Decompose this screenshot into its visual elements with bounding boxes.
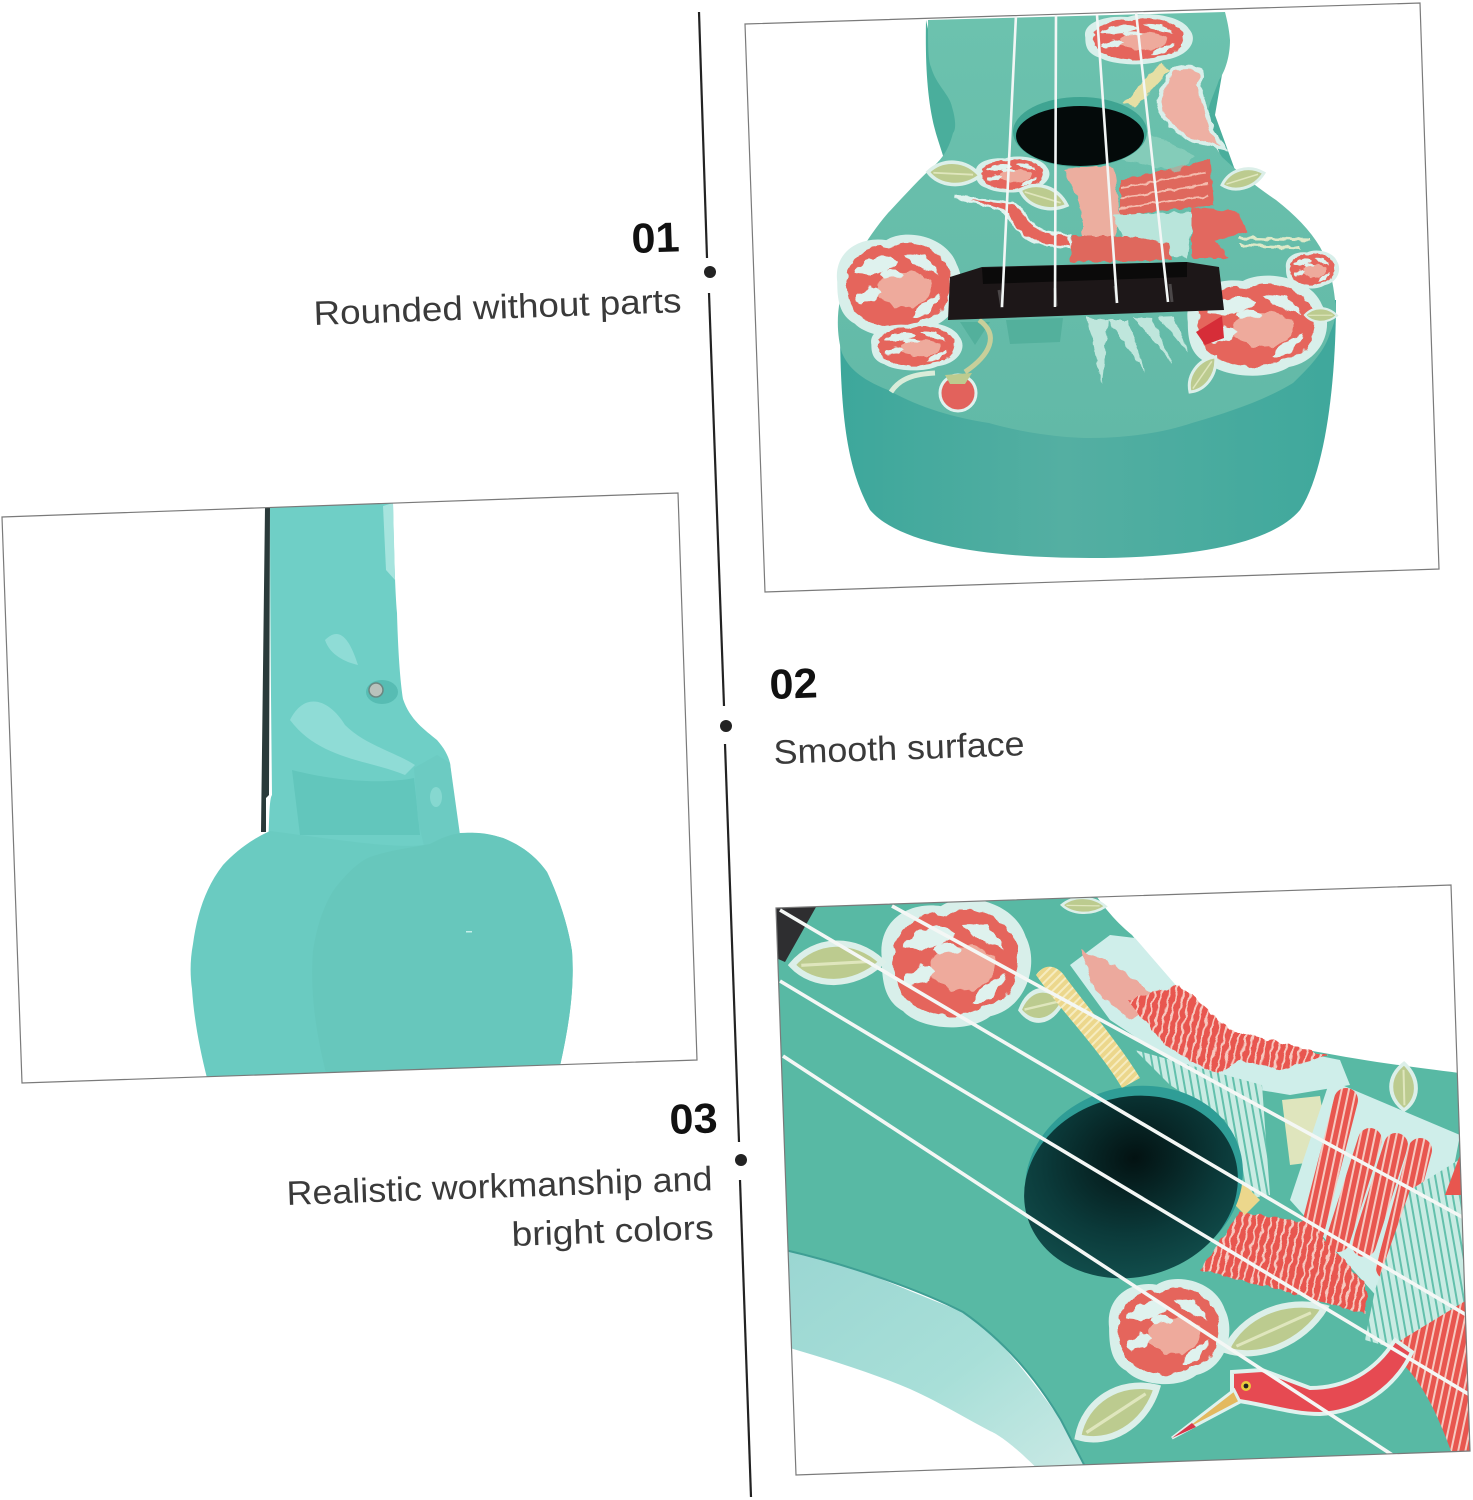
- neck block: [776, 907, 816, 962]
- body side: [191, 831, 573, 1078]
- tail red: [1070, 236, 1172, 262]
- fretboard edge: [261, 507, 270, 832]
- crane neck: [1232, 1340, 1412, 1414]
- number 01: 01: [631, 213, 680, 262]
- small mark: [466, 931, 472, 932]
- top flower: [881, 899, 1031, 1027]
- pale yellow feather: [1282, 1096, 1330, 1165]
- stems: [965, 320, 990, 372]
- tail feathers: [1087, 316, 1188, 384]
- timeline divider: [699, 12, 751, 1497]
- photo panel frame 1: [745, 3, 1439, 592]
- green feather area: [1122, 132, 1194, 172]
- neck lower shade: [292, 770, 420, 835]
- neck light strip: [383, 503, 395, 580]
- pink upper feather: [1080, 950, 1160, 1020]
- sound hole: [1016, 106, 1144, 166]
- bridge base: [948, 262, 1224, 320]
- neck: [268, 504, 451, 846]
- strings: [1002, 12, 1168, 307]
- crane beak and neck: [955, 197, 1072, 247]
- sound hole rim: [1004, 1062, 1264, 1298]
- sound hole: [1003, 1072, 1259, 1302]
- number 02: 02: [769, 659, 818, 708]
- bud: [940, 375, 976, 411]
- ukulele top face: [838, 12, 1336, 438]
- crane: [955, 62, 1310, 384]
- photo panel: ukulele body front: [837, 12, 1339, 558]
- red top right: [1445, 1145, 1473, 1195]
- crane eye: [1241, 1381, 1251, 1391]
- upper wing group: [1080, 950, 1328, 1075]
- top face close-up: [776, 897, 1473, 1480]
- description 03: Realistic workmanship and: [286, 1160, 713, 1213]
- photo panel frame 2: [2, 493, 697, 1083]
- pale wing halo: [1290, 1080, 1460, 1300]
- red body: [1385, 1295, 1473, 1462]
- bridge: [948, 262, 1224, 320]
- red mark: [1196, 316, 1224, 345]
- red upper plumage: [1128, 985, 1328, 1075]
- photo panel frame 3: [776, 885, 1470, 1475]
- saddle notches: [999, 284, 1172, 308]
- crane beak: [1172, 1390, 1240, 1438]
- photo panel: ukulele side view: [191, 503, 573, 1078]
- screw recess: [366, 680, 398, 704]
- photo panel: ukulele close-up: [776, 896, 1473, 1480]
- description 01: Rounded without parts: [313, 282, 682, 333]
- yellow tips: [1230, 1178, 1260, 1215]
- moulded mark: [430, 787, 442, 807]
- yellow feather: [1036, 967, 1140, 1088]
- neck highlight: [290, 634, 415, 775]
- sound hole rim: [1013, 97, 1147, 167]
- description 03 second line: bright colors: [511, 1209, 714, 1254]
- red lower hatch: [1200, 1212, 1366, 1314]
- yellow feather: [1124, 62, 1170, 108]
- ukulele side wall: [840, 300, 1336, 558]
- description 02: Smooth surface: [773, 725, 1025, 772]
- bridge nut: [982, 262, 1187, 284]
- lower flower: [1109, 1279, 1229, 1384]
- feature 01: [313, 213, 682, 333]
- pale wing: [1064, 166, 1120, 262]
- right waist side wall: [1208, 75, 1234, 168]
- number 03: 03: [669, 1094, 718, 1143]
- leaves: [791, 942, 883, 984]
- screw: [369, 683, 383, 697]
- red wing fingers: [1312, 1100, 1420, 1268]
- flowers and leaves: [837, 14, 1339, 411]
- strings: [780, 906, 1473, 1460]
- pale ground: [1070, 935, 1350, 1095]
- upper pink wing: [1159, 67, 1224, 148]
- under-bridge reflection: [960, 318, 1063, 345]
- timeline dots: [704, 266, 747, 1166]
- pale feathers right: [1365, 1150, 1473, 1350]
- red wing upper: [1120, 160, 1214, 216]
- pale body: [1112, 212, 1194, 258]
- feature 03: [286, 1094, 718, 1254]
- face edge: [785, 1250, 1092, 1480]
- red wing right: [1192, 207, 1247, 258]
- body end face: [312, 833, 573, 1077]
- heel block: [450, 763, 460, 834]
- waist side wall: [926, 20, 956, 156]
- long feet: [1240, 238, 1310, 248]
- feature 02: [769, 659, 1025, 772]
- embroidery: [791, 896, 1473, 1462]
- side wall: [785, 1245, 1095, 1480]
- teal feathers: [1135, 1050, 1270, 1200]
